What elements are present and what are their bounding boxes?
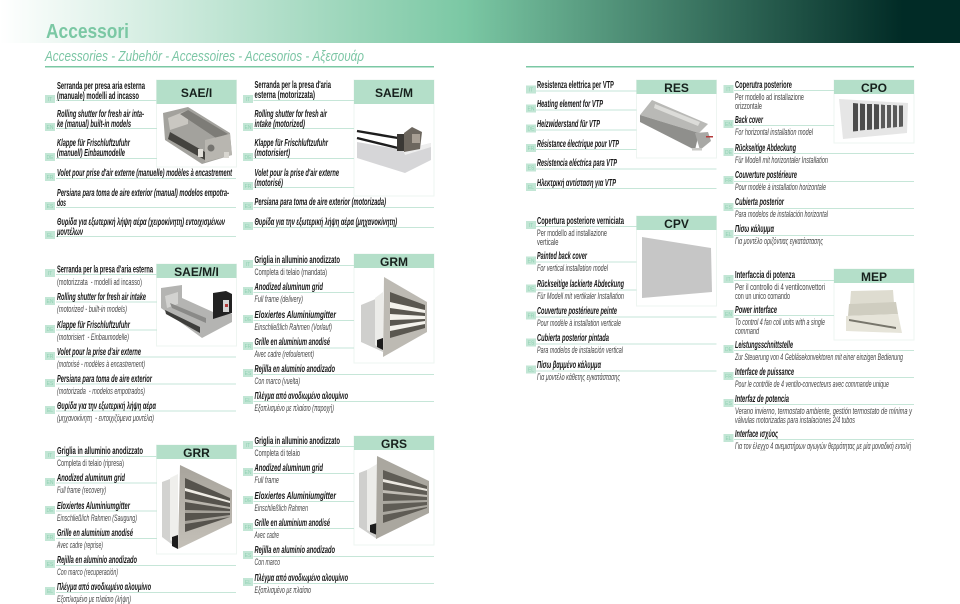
block: EL: Εξοπλισμένο με πλαίσιο (παροχή) bbox=[254, 403, 334, 414]
block: ES bbox=[243, 364, 434, 387]
block: FR: (motorisé) bbox=[254, 178, 283, 189]
block: EN: EN bbox=[528, 106, 535, 112]
block: ES: Cubierta posterior pintada bbox=[537, 333, 609, 344]
block: EN bbox=[724, 305, 834, 337]
block: DE: Einschließlich Rahmen (Saugung) bbox=[57, 513, 137, 524]
block: IT: IT bbox=[726, 87, 731, 93]
title: Accessori bbox=[46, 21, 129, 43]
block: FR: Grille en aluminium anodisé bbox=[254, 518, 330, 529]
block: DE: Eloxiertes Aluminiumgitter bbox=[254, 491, 337, 502]
block: ES: Rejilla en aluminio anodizado bbox=[254, 545, 335, 556]
block: EL: Για μοντέλο κάθετης εγκατάστασης bbox=[537, 372, 620, 383]
block: IT bbox=[243, 80, 354, 103]
block: EN: intake (motorized) bbox=[254, 119, 305, 130]
block: EN bbox=[45, 473, 157, 496]
block: EL: EL bbox=[725, 436, 732, 442]
block: IT: esterna (motorizzata) bbox=[254, 90, 315, 101]
section: RES bbox=[526, 80, 716, 191]
block: EL bbox=[243, 573, 434, 596]
block: EL bbox=[526, 178, 716, 191]
block: EN: For horizontal installation model bbox=[735, 127, 814, 138]
block: FR bbox=[243, 518, 354, 541]
block: ES bbox=[243, 545, 434, 568]
block: DE bbox=[45, 138, 157, 161]
block: ES: ES bbox=[47, 204, 54, 210]
block: ES: Con marco (recuperación) bbox=[57, 567, 118, 578]
panel: SAE/M product bbox=[354, 80, 434, 196]
block: EL: EL bbox=[47, 589, 53, 595]
block: EL bbox=[724, 224, 914, 247]
block: ES: Resistencia eléctrica para VTP bbox=[537, 158, 617, 169]
block: EL: Πλέγμα από ανοδιωμένο αλουμίνιο bbox=[254, 391, 348, 402]
block: EN: Painted back cover bbox=[537, 251, 588, 262]
block: IT: IT bbox=[48, 271, 52, 277]
block: EN: EN bbox=[245, 470, 252, 476]
block: ES: Rejilla en aluminio anodizado bbox=[254, 364, 335, 375]
panel: CPV product bbox=[636, 216, 716, 306]
block: FR: FR bbox=[725, 178, 732, 184]
panel: SAE/I product bbox=[156, 80, 236, 167]
section: MEP bbox=[724, 269, 914, 452]
block: FR: FR bbox=[528, 146, 535, 152]
block: DE: (motorisiert) bbox=[254, 148, 290, 159]
block: ES: ES bbox=[245, 553, 252, 559]
block: EL: Πλέγμα από ανοδιωμένο αλουμίνιο bbox=[57, 582, 151, 593]
panel: GRS product: GRS bbox=[381, 437, 407, 451]
block: EL: Πίσω βαμμένο κάλυμμα bbox=[537, 360, 601, 371]
block: DE: Für Modell mit horizontaler Installation bbox=[735, 155, 828, 166]
block: FR: Volet pour la prise d'air externe bbox=[254, 168, 339, 179]
block: IT: Griglia in alluminio anodizzato bbox=[254, 436, 340, 447]
block: FR: Grille en aluminium anodisé bbox=[57, 528, 133, 539]
block: EL: μοντέλων bbox=[56, 227, 83, 238]
section: SAE/M/I bbox=[45, 264, 236, 424]
panel: SAE/M/I product: SAE/M/I bbox=[174, 265, 219, 279]
block: EL: EL bbox=[47, 408, 53, 414]
block: EN: Back cover bbox=[735, 115, 764, 126]
block: ES: ES bbox=[245, 204, 252, 210]
block: IT: Per modello ad installazione bbox=[735, 92, 804, 103]
block: IT: verticale bbox=[537, 237, 558, 248]
image: MEP power interface bbox=[846, 290, 902, 333]
block: EN: command bbox=[735, 326, 759, 337]
block: EL bbox=[243, 217, 434, 230]
block: DE bbox=[243, 310, 354, 333]
block: FR: Couverture postérieure bbox=[735, 170, 797, 181]
block: DE bbox=[243, 491, 354, 514]
block: ES bbox=[526, 158, 716, 172]
block: IT: IT bbox=[246, 262, 250, 268]
block: IT: Resistenza elettrica per VTP bbox=[537, 80, 614, 91]
block: IT bbox=[45, 81, 157, 103]
block: EN: EN bbox=[725, 122, 732, 128]
block: FR bbox=[243, 168, 354, 190]
block: FR: FR bbox=[725, 374, 732, 380]
block: ES bbox=[526, 333, 716, 356]
block: ES: válvulas motorizadas para instalaciones 2/4 tubos bbox=[735, 415, 855, 426]
block: FR bbox=[243, 337, 354, 360]
block: EN: EN bbox=[47, 480, 54, 486]
panel: RES product bbox=[636, 80, 716, 158]
block: ES bbox=[243, 197, 434, 210]
section: SAE/M bbox=[243, 80, 434, 230]
block: EL: EL bbox=[528, 185, 534, 191]
block: FR: Volet pour la prise d'air externe bbox=[57, 347, 141, 358]
image: GRR grille bbox=[162, 465, 232, 549]
block: DE: DE bbox=[47, 155, 54, 161]
block: IT: (manuale) modelli ad incasso bbox=[57, 91, 139, 102]
block: DE bbox=[45, 501, 157, 524]
block: FR: Couverture postérieure peinte bbox=[537, 306, 617, 317]
block: IT: orizzontale bbox=[735, 101, 762, 112]
block: EL: Για μοντέλο οριζόντιας εγκατάστασης bbox=[735, 236, 823, 247]
block: EN bbox=[243, 282, 354, 305]
block: EN: Anodized aluminum grid bbox=[254, 463, 324, 474]
block: DE: Klappe für Frischluftzufuhr bbox=[254, 138, 329, 149]
panel: GRS product bbox=[354, 436, 434, 545]
block: IT: IT bbox=[246, 443, 250, 449]
block: IT bbox=[526, 80, 636, 94]
block: FR: FR bbox=[47, 354, 54, 360]
panel: CPO product bbox=[834, 80, 914, 143]
block: EN: To control 4 fan coil units with a single bbox=[735, 317, 825, 328]
block: DE: Einschließlich Rahmen (Vorlauf) bbox=[254, 322, 332, 333]
section: CPV bbox=[526, 216, 716, 383]
block: ES: ES bbox=[47, 562, 54, 568]
section: CPO bbox=[724, 80, 914, 247]
block: DE: (motorisiert - Einbaumodelle) bbox=[57, 332, 129, 343]
block: DE: (manuell) Einbaumodelle bbox=[57, 148, 125, 159]
block: EN: Rolling shutter for fresh air bbox=[254, 109, 328, 120]
block: IT: IT bbox=[246, 97, 250, 103]
block: FR bbox=[724, 367, 914, 390]
block: FR: Pour modèle à installation verticale bbox=[537, 318, 621, 329]
block: ES bbox=[724, 197, 914, 220]
block: IT bbox=[243, 436, 354, 459]
block: EN: Full frame (delivery) bbox=[254, 294, 303, 305]
block: FR: FR bbox=[245, 344, 252, 350]
block: FR: FR bbox=[245, 184, 252, 190]
block: IT bbox=[724, 270, 834, 302]
block: ES: Persiana para toma de aire exterior (motorizada) bbox=[254, 197, 386, 208]
block: FR bbox=[45, 347, 236, 370]
panel: SAE/I product: SAE/I bbox=[181, 86, 212, 100]
block: FR: Avec cadre (refoulement) bbox=[254, 349, 314, 360]
block: EL bbox=[526, 360, 716, 383]
block: IT: Interfaccia di potenza bbox=[735, 270, 795, 281]
block: IT: Per modello ad installazione bbox=[537, 228, 607, 239]
block: IT: Serranda per presa aria esterna bbox=[57, 81, 145, 92]
block: IT: Completa di telaio (ripresa) bbox=[57, 458, 124, 469]
block: IT: IT bbox=[529, 88, 533, 94]
block: EN bbox=[45, 109, 157, 131]
block: EN: ke (manual) built-in models bbox=[57, 119, 131, 130]
block: DE bbox=[724, 340, 914, 363]
block: EL bbox=[45, 401, 236, 424]
panel: CPV product: CPV bbox=[664, 217, 689, 231]
block: DE: DE bbox=[725, 347, 733, 353]
panel: SAE/M product: SAE/M bbox=[375, 86, 413, 100]
block: IT: Serranda per la presa d'aria bbox=[254, 80, 331, 91]
block: FR: Grille en aluminium anodisé bbox=[254, 337, 330, 348]
block: EN: EN bbox=[245, 125, 252, 131]
block: DE: Für Modell mit vertikaler Installation bbox=[537, 291, 624, 302]
block: DE: Leistungsschnittstelle bbox=[735, 340, 793, 351]
image: RES heating element bbox=[640, 100, 713, 150]
block: DE: Eloxiertes Aluminiumgitter bbox=[254, 310, 337, 321]
block: DE: Heizwiderstand für VTP bbox=[537, 119, 600, 130]
block: ES bbox=[45, 555, 236, 578]
block: EN bbox=[526, 251, 636, 274]
block: FR bbox=[724, 170, 914, 193]
block: IT: Griglia in alluminio anodizzato bbox=[254, 255, 340, 266]
block: IT: IT bbox=[726, 277, 731, 283]
subtitle: Accessories - Zubehör - Accessoires - Accesorios - Αξεσουάρ bbox=[44, 48, 364, 65]
section: SAE/I bbox=[45, 80, 236, 239]
block: FR bbox=[45, 168, 236, 181]
panel: SAE/M/I product bbox=[156, 264, 236, 346]
block: FR: Avec cadre bbox=[254, 530, 279, 541]
panel: GRR product bbox=[156, 445, 236, 554]
block: DE bbox=[724, 143, 914, 166]
image: SAE/M/I shutter box bbox=[161, 285, 232, 338]
block: EL: EL bbox=[528, 368, 534, 374]
block: DE: Eloxiertes Aluminiumgitter bbox=[57, 501, 131, 512]
block: DE: Rückseitige Abdeckung bbox=[735, 143, 796, 154]
block: EN: Rolling shutter for fresh air intake bbox=[57, 292, 146, 303]
block: DE: DE bbox=[245, 498, 252, 504]
block: ES: Para modelos de instalación horizontal bbox=[735, 209, 829, 220]
block: IT: Per il controllo di 4 ventilconvettori bbox=[735, 282, 825, 293]
block: FR: Avec cadre (reprise) bbox=[56, 540, 103, 551]
block: FR: FR bbox=[47, 175, 54, 181]
block: EL: Ηλεκτρική αντίσταση για VTP bbox=[537, 178, 616, 189]
block: EL: EL bbox=[725, 232, 732, 238]
image: CPV painted back cover bbox=[642, 237, 712, 298]
block: DE: Rückseitige lackierte Abdeckung bbox=[537, 279, 624, 290]
block: FR: FR bbox=[245, 525, 252, 531]
block: FR: Résistance électrique pour VTP bbox=[537, 139, 619, 150]
panel: MEP product bbox=[834, 269, 914, 340]
block: DE: DE bbox=[245, 155, 252, 161]
block: ES: Rejilla en aluminio anodizado bbox=[57, 555, 137, 566]
block: EN: (motorized - built-in models) bbox=[57, 304, 127, 315]
block: FR bbox=[526, 306, 716, 329]
block: DE: DE bbox=[528, 286, 535, 292]
block: IT: Griglia in alluminio anodizzato bbox=[57, 446, 143, 457]
block: EL: EL bbox=[245, 398, 251, 404]
block: ES: ES bbox=[528, 166, 535, 172]
block: EN: Full frame (recovery) bbox=[57, 485, 106, 496]
block: EL bbox=[724, 429, 914, 452]
block: EN: EN bbox=[47, 299, 54, 305]
block: FR bbox=[45, 528, 157, 551]
block: EL: EL bbox=[245, 224, 251, 230]
block: ES: ES bbox=[725, 205, 732, 211]
block: EL: Εξοπλισμένο με πλαίσιο bbox=[254, 585, 311, 596]
block: IT: IT bbox=[529, 223, 533, 229]
block: IT: Coperutra posteriore bbox=[735, 80, 792, 91]
section: GRS bbox=[243, 436, 434, 596]
block: DE bbox=[45, 320, 157, 343]
block: EN: Anodized aluminum grid bbox=[56, 473, 126, 484]
block: DE: DE bbox=[47, 327, 54, 333]
section: GRR bbox=[45, 445, 236, 604]
block: IT bbox=[45, 446, 157, 469]
block: EL: Θυρίδα για εξωτερική λήψη αέρα (χειροκίνητη) εντοιχισμένων bbox=[57, 217, 225, 228]
block: EN bbox=[243, 463, 354, 486]
block: FR: FR bbox=[528, 314, 535, 320]
block: ES: Persiana para toma de aire exterior bbox=[57, 374, 153, 385]
block: EN: Anodized aluminum grid bbox=[254, 282, 324, 293]
block: FR: FR bbox=[47, 535, 54, 541]
block: ES: ES bbox=[245, 371, 252, 377]
block: IT: (motorizzata - modelli ad incasso) bbox=[57, 277, 142, 288]
block: EN: EN bbox=[245, 289, 252, 295]
block: EN: Power interface bbox=[735, 305, 777, 316]
image: SAE/I shutter box bbox=[163, 107, 232, 164]
block: FR: Volet pour prise d'air externe (manuelle) modèles à encastrement bbox=[57, 168, 232, 179]
block: IT: Copertura posteriore verniciata bbox=[537, 216, 624, 227]
block: EL: EL bbox=[47, 233, 53, 239]
image: GRS grille bbox=[359, 456, 429, 539]
block: DE bbox=[526, 119, 636, 132]
block: EL: Θυρίδα για την εξωτερική λήψη αέρα (μηχανοκίνητη) bbox=[254, 217, 397, 228]
panel: GRR product: GRR bbox=[183, 446, 210, 460]
block: DE: Klappe für Frischluftzufuhr bbox=[57, 138, 131, 149]
block: EN: For vertical installation model bbox=[537, 263, 609, 274]
image: GRM grille bbox=[361, 277, 427, 357]
block: EL: EL bbox=[245, 580, 251, 586]
block: ES: Interfaz de potencia bbox=[735, 394, 789, 405]
block: IT bbox=[45, 264, 157, 288]
block: FR: Pour modèle à installation horizontale bbox=[735, 182, 826, 193]
block: ES: (motorizada - modelos empotrados) bbox=[57, 386, 145, 397]
block: DE: DE bbox=[528, 126, 535, 132]
block: IT bbox=[243, 255, 354, 278]
block: ES: Persiana para toma de aire exterior (manual) modelos empotra- bbox=[57, 188, 229, 199]
block: ES bbox=[45, 374, 236, 397]
block: EL: (μηχανοκίνητη - εντοιχιζόμενα μοντέλα) bbox=[57, 413, 154, 424]
block: IT: IT bbox=[48, 453, 52, 459]
block: EL: Πλέγμα από ανοδιωμένο αλουμίνιο bbox=[254, 573, 348, 584]
block: EN bbox=[243, 109, 354, 131]
block: ES: Con marco (vuelta) bbox=[254, 376, 300, 387]
block: ES bbox=[45, 188, 236, 210]
block: IT bbox=[724, 80, 834, 112]
block: EN: EN bbox=[47, 125, 54, 131]
block: EL bbox=[45, 582, 236, 604]
block: DE: Einschließlich Rahmen bbox=[254, 503, 308, 514]
section: GRM bbox=[243, 254, 434, 414]
image: SAE/M motorized shutter bbox=[357, 127, 431, 173]
block: FR bbox=[526, 139, 636, 152]
header gradient band bbox=[0, 0, 960, 43]
block: EL bbox=[243, 391, 434, 414]
block: EL: Θυρίδα για την εξωτερική λήψη αέρα bbox=[57, 401, 156, 412]
panel: GRM product: GRM bbox=[380, 255, 408, 269]
panel: MEP product: MEP bbox=[861, 270, 887, 284]
block: EN: Rolling shutter for fresh air inta- bbox=[57, 109, 144, 120]
block: DE: DE bbox=[47, 508, 54, 514]
image: CPO back cover with vents bbox=[839, 99, 908, 139]
block: ES bbox=[724, 394, 914, 426]
block: DE: DE bbox=[245, 317, 252, 323]
panel: GRM product bbox=[354, 254, 434, 363]
panel: RES product: RES bbox=[664, 81, 689, 95]
block: EN bbox=[724, 115, 834, 138]
block: ES: dos bbox=[57, 198, 66, 209]
block: DE: DE bbox=[725, 150, 733, 156]
block: DE bbox=[243, 138, 354, 161]
block: EN bbox=[45, 292, 157, 315]
block: ES: Cubierta posterior bbox=[735, 197, 785, 208]
block: ES: Con marco bbox=[254, 557, 280, 568]
panel: CPO product: CPO bbox=[861, 81, 887, 95]
block: EL bbox=[45, 217, 236, 239]
block: EL: Interface ισχύος bbox=[735, 429, 778, 440]
block: IT: Completa di telaio (mandata) bbox=[254, 267, 327, 278]
block: FR: (motorisé - modèles à encastrement) bbox=[57, 359, 145, 370]
block: EN bbox=[526, 99, 636, 112]
block: ES: ES bbox=[528, 340, 535, 346]
block: EN: EN bbox=[528, 258, 535, 264]
block: DE: Klappe für Frischluftzufuhr bbox=[57, 320, 131, 331]
block: IT: con un unico comando bbox=[735, 291, 790, 302]
block: EL: Πίσω κάλυμμα bbox=[735, 224, 774, 235]
block: DE bbox=[526, 279, 636, 302]
block: IT: Serranda per la presa d'aria esterna bbox=[57, 264, 153, 276]
block: ES: ES bbox=[47, 381, 54, 387]
block: EN: Full frame bbox=[254, 475, 279, 486]
block: ES: Para modelos de instalación vertical bbox=[537, 345, 623, 356]
block: IT: Completa di telaio bbox=[254, 448, 300, 459]
block: IT: IT bbox=[48, 97, 52, 103]
block: IT bbox=[526, 216, 636, 248]
block: FR: Interface de puissance bbox=[735, 367, 794, 378]
block: EN: Heating element for VTP bbox=[537, 99, 603, 110]
block: EN: EN bbox=[725, 312, 732, 318]
block: ES: ES bbox=[725, 401, 732, 407]
